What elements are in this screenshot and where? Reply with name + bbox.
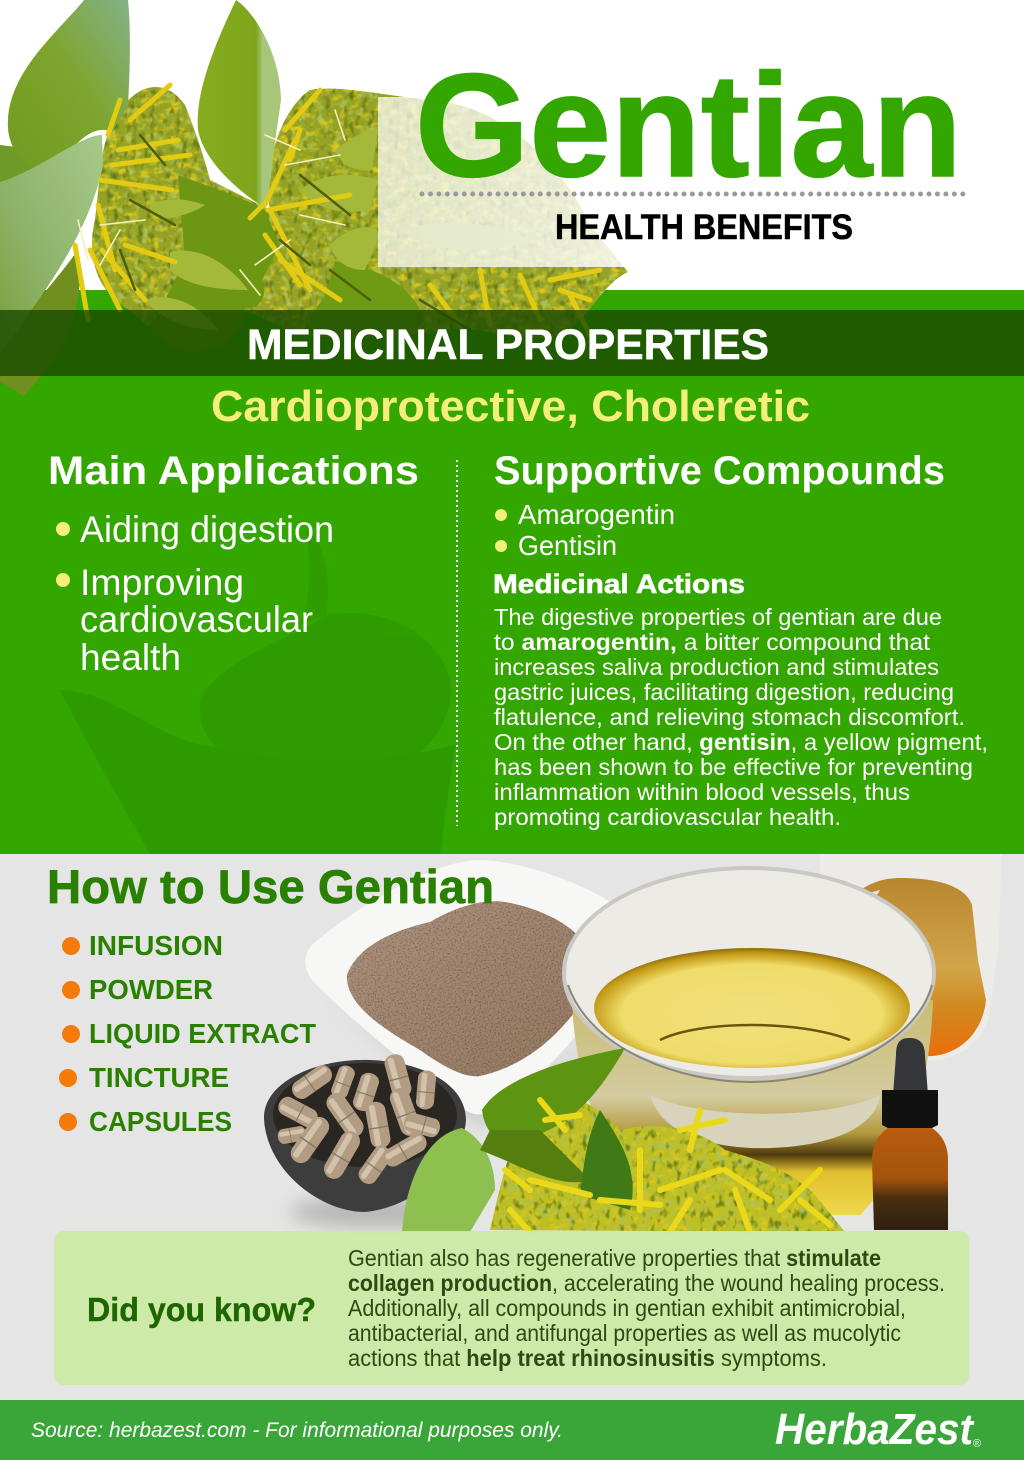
leaf: centre leaf (580, 1110, 633, 1210)
photo: dropper bottle (872, 1038, 948, 1230)
photo: bowl of capsules (264, 1052, 466, 1228)
callout text (348, 1245, 945, 1371)
text: capsules: CAPSULES (89, 1106, 232, 1137)
flower mass: main cluster (92, 87, 628, 350)
text block: medicinal actions description: gastric juices, facilitating digestion, reducing (494, 679, 954, 705)
leaf: centre upright leaf (198, 0, 281, 206)
callout text: antibacterial, and antifungal properties as well as mucolytic (348, 1320, 901, 1346)
title: Gentian (415, 44, 962, 208)
text: improving cardiovascular health: cardiovascular (80, 599, 313, 640)
illustration: ghosted stomach and hands behind main applications (60, 530, 455, 854)
leaf: large back leaf (150, 175, 280, 351)
flower spikes: dark gaps (120, 135, 470, 330)
icon: bullet gentisin (495, 540, 507, 552)
text block: medicinal actions description (494, 604, 988, 830)
photo: glass bowl of liquid (564, 868, 934, 1215)
shadow: capsule bowl (290, 1196, 460, 1228)
stomach (200, 613, 451, 770)
cap (882, 1090, 938, 1130)
liquid surface (594, 948, 910, 1068)
heading: supportive compounds: Supportive Compounds (494, 449, 945, 493)
glass body (572, 1000, 933, 1215)
photo: gentian flowers and leaves hero (0, 0, 628, 396)
text: improving cardiovascular health (80, 562, 313, 678)
leaf: large pale left leaf (402, 1128, 495, 1232)
panel: how to use background (0, 854, 1024, 1400)
icon: infusion bullet (62, 937, 80, 955)
banner: medicinal properties (0, 310, 1024, 376)
bowl (305, 860, 640, 1114)
glass lower reflection (650, 1095, 880, 1148)
leaf: top left leaf (8, 0, 130, 180)
dotted divider (422, 192, 964, 196)
leaf: right back leaf (300, 262, 425, 337)
text block: medicinal actions description: flatulence, and relieving stomach discomfort. (494, 704, 965, 730)
text: improving cardiovascular health: health (80, 637, 181, 678)
callout text: collagen production, accelerating the wound healing process. (348, 1270, 945, 1296)
photo: gentian flowers foreground (402, 1048, 845, 1232)
capsules (275, 1052, 442, 1187)
text block: medicinal actions description: On the other hand, gentisin, a yellow pigment, (494, 729, 988, 755)
text block: medicinal actions description: increases saliva production and stimulates (494, 654, 939, 680)
flower spikes: thin pale stamens (78, 110, 345, 295)
logo: registered mark: ® (973, 1438, 981, 1450)
text: liquid extract: LIQUID EXTRACT (89, 1018, 316, 1049)
icon: capsules bullet (59, 1113, 77, 1131)
photo: white bowl of powder (305, 860, 640, 1125)
callout text: Additionally, all compounds in gentian exhibit antimicrobial, (348, 1295, 906, 1321)
text: improving cardiovascular health: Improving (80, 562, 244, 603)
glass front rim (568, 985, 932, 1082)
text: aiding digestion: Aiding digestion (80, 509, 334, 550)
text block: medicinal actions description: inflammation within blood vessels, thus (494, 779, 910, 805)
bowl (264, 1060, 466, 1212)
petals (505, 1100, 830, 1232)
glass interior (565, 869, 933, 1077)
subheading: properties list: Cardioprotective, Choleretic (211, 382, 810, 431)
callout background (54, 1231, 969, 1385)
leaf: mid leaf (480, 1130, 590, 1182)
text block: medicinal actions description: The digestive properties of gentian are due (494, 604, 942, 630)
footer bar (0, 1400, 1024, 1460)
leaf: upper left small leaf (0, 145, 48, 200)
icon: powder bullet (62, 981, 80, 999)
list: preparation forms (59, 930, 316, 1137)
powder (347, 901, 590, 1076)
flower spikes: buds (145, 129, 530, 330)
icon: liquid extract bullet (62, 1025, 80, 1043)
icon: tincture bullet (59, 1069, 77, 1087)
flower spikes: yellow petals (75, 85, 600, 335)
translucent white veil behind title (378, 97, 1024, 267)
bowl inner shadow (273, 1063, 457, 1167)
text block: medicinal actions description: has been shown to be effective for preventing (494, 754, 973, 780)
jar liquid (835, 878, 986, 1056)
photo: amber glass jar (820, 854, 1002, 1060)
hands (60, 690, 455, 854)
leaf: upper dark leaf (482, 1048, 625, 1141)
liquid highlight (660, 1025, 850, 1040)
bulb (893, 1038, 928, 1095)
text: amarogentin: Amarogentin (518, 499, 675, 530)
text block: medicinal actions description: to amarogentin, a bitter compound that (494, 629, 930, 655)
esophagus (300, 530, 328, 625)
jar glass (820, 854, 1002, 1060)
leaf: lower left leaf (0, 250, 80, 396)
icon: bullet 2 (56, 573, 70, 587)
footer (0, 1400, 1024, 1460)
panel: supportive compounds (493, 449, 988, 830)
text: powder: POWDER (89, 974, 213, 1005)
callout heading: Did you know? (87, 1291, 316, 1328)
glass bottle (872, 1128, 948, 1230)
callout text: actions that help treat rhinosinusitis symptoms. (348, 1345, 827, 1371)
callout: did you know (54, 1231, 969, 1385)
panel: main applications (48, 449, 419, 678)
callout text: Gentian also has regenerative properties that stimulate (348, 1245, 881, 1271)
heading: medicinal actions: Medicinal Actions (493, 569, 745, 599)
text: infusion: INFUSION (89, 930, 223, 961)
glass rim (564, 868, 934, 1078)
icon: bullet amarogentin (495, 509, 507, 521)
icon: bullet 1 (56, 522, 70, 536)
source note: Source: herbazest.com - For informational purposes only. (31, 1419, 563, 1442)
text: tincture: TINCTURE (89, 1062, 229, 1093)
logo: HerbaZest: HerbaZest (775, 1405, 975, 1454)
text block: medicinal actions description: promoting cardiovascular health. (494, 804, 841, 830)
heading: how to use gentian: How to Use Gentian (47, 860, 494, 913)
text: gentisin: Gentisin (518, 530, 617, 561)
panel: medicinal properties green background (0, 290, 1024, 854)
subtitle: HEALTH BENEFITS (555, 208, 853, 247)
column divider (456, 460, 458, 826)
leaf: left front leaf (0, 135, 103, 352)
shadow: bowl (330, 1000, 610, 1125)
jar highlight (828, 890, 880, 950)
heading: medicinal properties: MEDICINAL PROPERTIES (247, 321, 769, 369)
flower mass (490, 1095, 845, 1232)
heading: main applications: Main Applications (48, 449, 419, 493)
